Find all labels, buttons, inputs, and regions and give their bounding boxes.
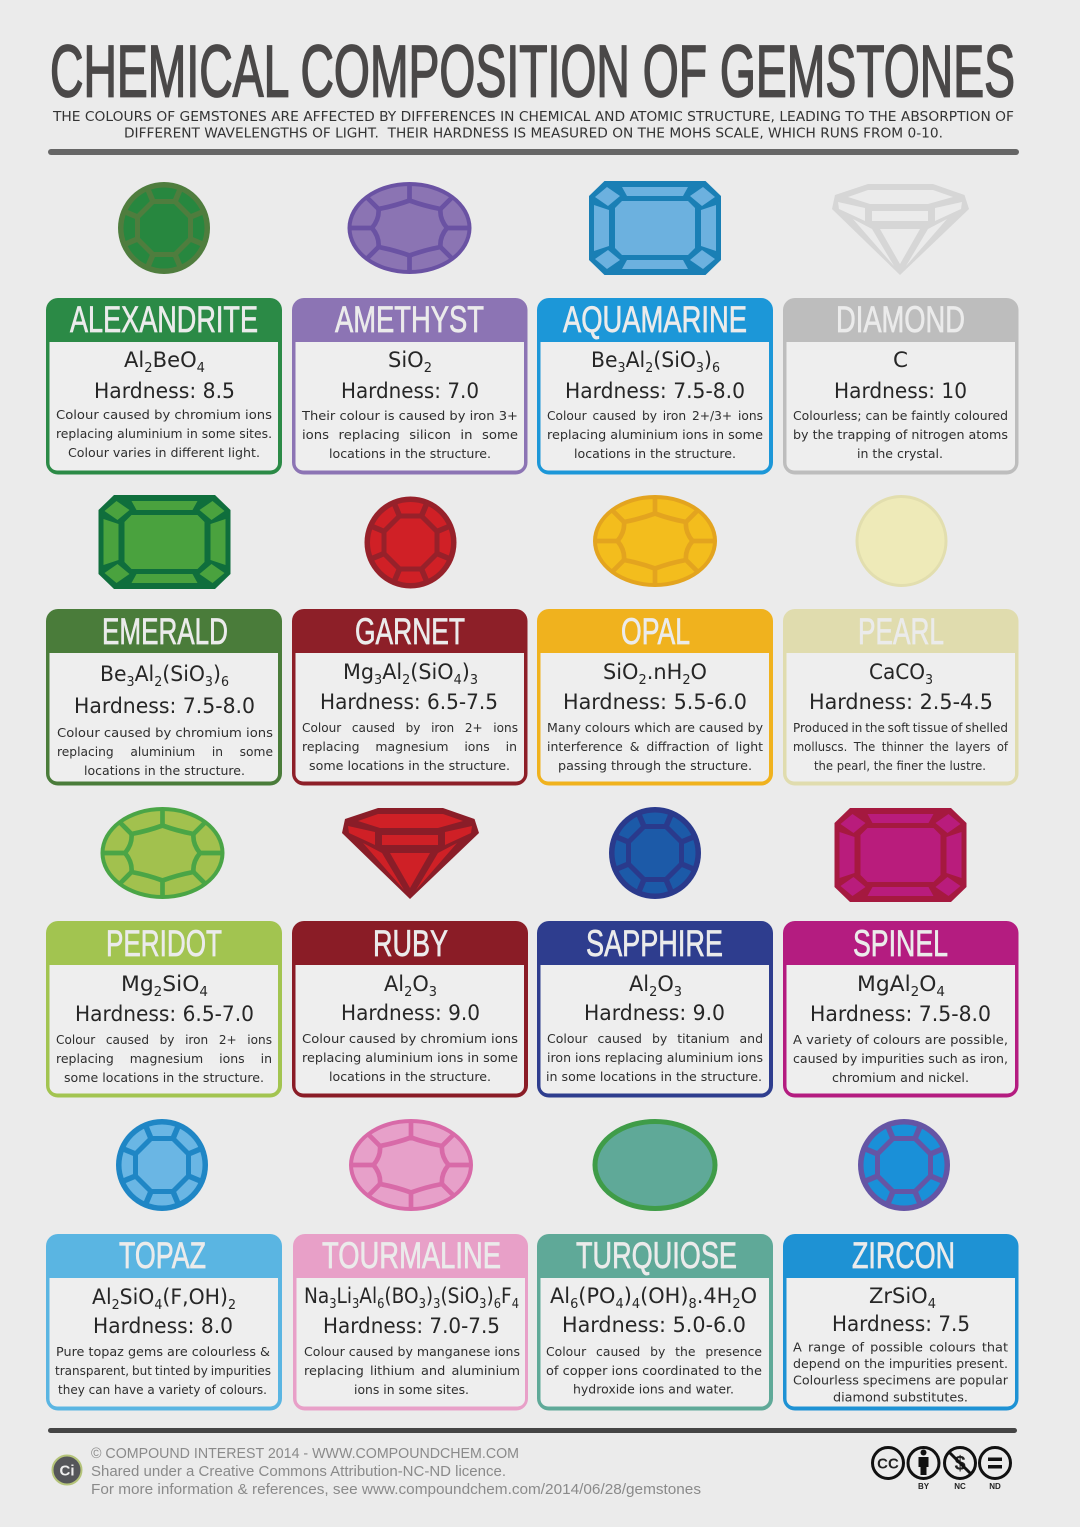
name: PERIDOT — [106, 923, 222, 964]
name: PEARL — [858, 611, 944, 652]
formula: O — [919, 972, 936, 996]
formula: O — [691, 660, 707, 684]
formula: 3 — [352, 1297, 359, 1312]
formula: 4 — [199, 985, 208, 1000]
card frame — [783, 609, 1018, 786]
icon: turquoise gem — [595, 1122, 715, 1208]
description — [793, 1340, 1009, 1404]
description: of copper ions coordinated to the — [546, 1363, 762, 1378]
description: Their colour is caused by iron 3+ — [301, 408, 518, 423]
formula: SiO — [120, 1285, 154, 1309]
name: EMERALD — [102, 611, 228, 652]
formula: Al — [135, 662, 154, 686]
formula: Al — [124, 348, 144, 372]
formula: 3 — [419, 1297, 426, 1312]
icon: opal gem — [593, 495, 717, 587]
subtitle text — [52, 110, 1014, 142]
icon: zircon gem — [858, 1119, 950, 1211]
description: ions replacing silicon in some — [302, 427, 518, 442]
card: Peridot — [46, 921, 282, 1098]
formula: Al — [92, 1285, 112, 1309]
description: by the trapping of nitrogen atoms — [793, 427, 1008, 442]
formula: SiO — [162, 972, 199, 996]
card: Ruby — [292, 921, 528, 1098]
formula: 3 — [433, 1297, 440, 1312]
description: iron ions replacing aluminium ions — [547, 1050, 763, 1065]
formula: 4 — [615, 1297, 624, 1312]
formula: 2 — [154, 675, 162, 690]
hardness: Hardness: 7.5-8.0 — [810, 1002, 991, 1026]
formula: Mg — [121, 972, 152, 996]
card: Pearl — [783, 609, 1018, 786]
description: replacing aluminium in some sites. — [56, 426, 272, 441]
formula: ) — [426, 1284, 433, 1308]
formula: ZrSiO — [869, 1284, 928, 1308]
footer credits — [91, 1445, 701, 1498]
formula: (SiO — [162, 662, 205, 686]
formula: O — [657, 972, 674, 996]
description — [301, 408, 518, 461]
formula: (SiO — [653, 348, 696, 372]
formula: Li — [337, 1284, 352, 1308]
formula: SiO — [388, 348, 424, 372]
formula: 2 — [144, 361, 153, 376]
description: Colour caused by chromium ions — [302, 1031, 518, 1046]
description: replacing aluminium ions in some — [302, 1050, 518, 1065]
card: Topaz — [46, 1234, 282, 1410]
description: locations in the structure. — [574, 446, 736, 461]
formula: 8 — [689, 1297, 697, 1312]
icon: peridot gem — [100, 807, 224, 899]
name: RUBY — [373, 923, 448, 964]
formula: ) — [624, 1284, 632, 1308]
icon: Creative Commons licence badges: CC — [877, 1456, 899, 1472]
description — [304, 1344, 520, 1397]
icon: Creative Commons licence badges — [872, 1448, 1010, 1491]
formula: Al — [629, 972, 649, 996]
formula: Al — [359, 1284, 377, 1308]
description: transparent, but tinted by impurities — [55, 1363, 271, 1378]
footer credits: Shared under a Creative Commons Attribution-NC-ND licence. — [91, 1463, 506, 1480]
icon: ruby gem — [342, 808, 479, 899]
hardness: Hardness: 9.0 — [584, 1001, 725, 1025]
formula: 3 — [470, 673, 478, 688]
formula: Al — [626, 348, 645, 372]
card: Sapphire — [537, 921, 773, 1098]
formula: 4 — [454, 673, 462, 688]
hardness: Hardness: 7.5-8.0 — [74, 694, 255, 718]
name: OPAL — [621, 611, 690, 652]
description: Colourless specimens are popular — [793, 1372, 1009, 1388]
card frame — [292, 298, 528, 474]
formula: CaCO — [869, 660, 928, 684]
card frame — [46, 921, 282, 1098]
formula: 3 — [674, 985, 682, 1000]
description: in the crystal. — [857, 446, 943, 461]
formula: ) — [462, 660, 470, 684]
subtitle text: DIFFERENT WAVELENGTHS OF LIGHT. THEIR HARDNESS IS MEASURED ON THE MOHS SCALE, WHICH RUNS FROM 0-10. — [124, 126, 943, 142]
icon: Creative Commons licence badges: ND — [989, 1482, 1001, 1491]
description: Colour varies in different light. — [68, 445, 260, 460]
card frame — [46, 609, 282, 786]
card: Tourmaline — [293, 1234, 528, 1410]
formula: 2 — [112, 1298, 120, 1313]
card: Spinel — [783, 921, 1018, 1098]
icon: garnet gem — [364, 496, 456, 588]
formula: 4 — [154, 1298, 162, 1313]
description: Colour caused by manganese ions — [304, 1344, 520, 1359]
name: DIAMOND — [836, 299, 965, 340]
description: ions in some sites. — [354, 1382, 469, 1397]
formula: 3 — [696, 361, 704, 376]
card: Opal — [537, 609, 773, 786]
card frame — [292, 609, 528, 786]
description: Colour caused by iron 2+/3+ ions — [547, 408, 763, 423]
formula: (OH) — [640, 1284, 689, 1308]
formula: ) — [704, 348, 712, 372]
description: some locations in the structure. — [64, 1070, 264, 1085]
card: Aquamarine — [537, 298, 773, 474]
hardness: Hardness: 2.5-4.5 — [809, 690, 993, 714]
formula: 2 — [404, 985, 412, 1000]
description: molluscs. The thinner the layers of — [793, 739, 1009, 754]
formula: 3 — [374, 673, 382, 688]
description: Many colours which are caused by — [547, 720, 764, 735]
card frame — [537, 921, 773, 1098]
icon: emerald gem — [98, 495, 230, 589]
formula: O — [412, 972, 429, 996]
formula: F — [501, 1284, 512, 1308]
hardness: Hardness: 6.5-7.5 — [320, 690, 498, 714]
formula: 6 — [570, 1297, 578, 1312]
hardness: Hardness: 7.0 — [341, 379, 479, 403]
description: caused by impurities such as iron, — [793, 1051, 1008, 1066]
formula: O — [741, 1284, 757, 1308]
formula: 6 — [712, 361, 720, 376]
description: Colour caused by chromium ions — [56, 407, 272, 422]
icon: Creative Commons licence badges: NC — [954, 1482, 966, 1491]
formula: Be — [591, 348, 618, 372]
name: ALEXANDRITE — [70, 299, 258, 340]
card: Turquoise — [537, 1234, 773, 1410]
name: GARNET — [355, 611, 465, 652]
formula: Al — [384, 972, 404, 996]
description: Colour caused by iron 2+ ions — [302, 720, 518, 735]
card frame — [46, 298, 282, 474]
card: Zircon — [783, 1234, 1018, 1410]
name: SPINEL — [853, 923, 948, 964]
formula: 2 — [682, 673, 691, 688]
formula: 4 — [936, 985, 945, 1000]
card frame — [783, 921, 1018, 1098]
name: ZIRCON — [852, 1235, 955, 1276]
icon: amethyst gem — [348, 182, 472, 274]
description: locations in the structure. — [329, 446, 491, 461]
description: A range of possible colours that — [793, 1340, 1008, 1354]
formula: 3 — [925, 673, 933, 688]
description: replacing magnesium ions in — [302, 739, 517, 754]
name: TOPAZ — [119, 1235, 206, 1276]
name: SAPPHIRE — [586, 923, 723, 964]
icon: topaz gem — [116, 1119, 208, 1211]
description — [547, 720, 764, 773]
card frame — [537, 609, 773, 786]
formula: Al — [382, 660, 402, 684]
footer credits: For more information & references, see www.compoundchem.com/2014/06/28/gemstones — [91, 1481, 701, 1498]
description: replacing lithium and aluminium — [304, 1363, 520, 1378]
description — [56, 407, 272, 460]
formula: 6 — [221, 675, 229, 690]
card: Emerald — [46, 609, 282, 786]
hardness: Hardness: 7.5 — [832, 1312, 970, 1336]
description: replacing aluminium ions in some — [547, 427, 763, 442]
icon: sapphire gem — [609, 807, 701, 899]
formula: 3 — [329, 1297, 337, 1312]
hardness: Hardness: 9.0 — [341, 1001, 480, 1025]
formula: (SiO — [410, 660, 454, 684]
formula: BeO — [153, 348, 197, 372]
description: A variety of colours are possible, — [793, 1032, 1008, 1047]
hardness: Hardness: 5.5-6.0 — [563, 690, 747, 714]
formula: (PO — [578, 1284, 615, 1308]
description: in some locations in the structure. — [546, 1069, 762, 1084]
formula: 2 — [649, 985, 657, 1000]
formula: 4 — [632, 1297, 640, 1312]
icon: spinel gem — [834, 808, 966, 902]
formula: (SiO — [440, 1284, 479, 1308]
description: replacing magnesium ions in — [56, 1051, 272, 1066]
icon: Creative Commons licence badges: $ — [954, 1453, 966, 1475]
formula: 2 — [645, 361, 653, 376]
icon: Compound Interest logo: Ci — [60, 1462, 74, 1480]
description: locations in the structure. — [84, 763, 245, 778]
description — [793, 1032, 1008, 1085]
description — [793, 408, 1008, 461]
description: Colourless; can be faintly coloured — [793, 408, 1008, 423]
description — [302, 1031, 518, 1084]
formula: 2 — [228, 1298, 236, 1313]
formula: 3 — [127, 675, 135, 690]
hardness: Hardness: 8.0 — [93, 1314, 233, 1338]
formula: Al — [550, 1284, 570, 1308]
card: Diamond — [783, 298, 1018, 474]
formula: ) — [486, 1284, 494, 1308]
description: Produced in the soft tissue of shelled — [793, 720, 1008, 735]
formula: ) — [213, 662, 221, 686]
description: chromium and nickel. — [832, 1070, 969, 1085]
description: some locations in the structure. — [309, 758, 510, 773]
formula: 6 — [494, 1297, 501, 1312]
formula: 2 — [911, 985, 919, 1000]
description — [547, 408, 763, 461]
description — [56, 1032, 272, 1085]
icon: aquamarine gem — [589, 181, 721, 275]
card: Amethyst — [292, 298, 528, 474]
formula: 3 — [429, 985, 437, 1000]
formula: 2 — [639, 673, 647, 688]
description: hydroxide ions and water. — [573, 1382, 734, 1396]
formula: .nH — [647, 660, 682, 684]
formula: Be — [100, 662, 127, 686]
formula: .4H — [697, 1284, 732, 1308]
description: the pearl, the finer the lustre. — [814, 758, 986, 773]
card frame — [293, 1234, 528, 1410]
formula: 4 — [928, 1297, 936, 1312]
card frame — [292, 921, 528, 1098]
description: diamond substitutes. — [833, 1390, 968, 1404]
hardness: Hardness: 7.5-8.0 — [565, 379, 745, 403]
formula: 2 — [424, 361, 432, 376]
card frame — [783, 1234, 1018, 1410]
formula: (F,OH) — [162, 1285, 228, 1309]
hardness: Hardness: 7.0-7.5 — [323, 1314, 500, 1338]
name: TURQUIOSE — [576, 1235, 737, 1276]
card frame — [537, 1234, 773, 1410]
icon: tourmaline gem — [349, 1119, 473, 1211]
description: they can have a variety of colours. — [58, 1382, 267, 1397]
name: AQUAMARINE — [563, 299, 747, 340]
card frame — [783, 298, 1018, 474]
icon: Compound Interest logo — [52, 1456, 82, 1484]
formula: (BO — [384, 1284, 419, 1308]
description — [57, 725, 273, 778]
footer credits: © COMPOUND INTEREST 2014 - WWW.COMPOUNDCHEM.COM — [91, 1445, 519, 1462]
formula: 6 — [377, 1297, 384, 1312]
formula: Na — [304, 1284, 333, 1308]
card frame — [537, 298, 773, 474]
description — [546, 1344, 762, 1396]
description: replacing aluminium in some — [57, 744, 273, 759]
formula: SiO — [603, 660, 639, 684]
description: Colour caused by iron 2+ ions — [56, 1032, 272, 1047]
formula: MgAl — [857, 972, 909, 996]
card: Garnet — [292, 609, 528, 786]
formula: 4 — [197, 361, 205, 376]
formula: Mg — [343, 660, 374, 684]
icon: pearl gem — [857, 496, 946, 586]
hardness: Hardness: 10 — [834, 379, 967, 403]
description: passing through the structure. — [558, 758, 752, 773]
hardness: Hardness: 8.5 — [94, 379, 235, 403]
description — [546, 1031, 763, 1084]
description: depend on the impurities present. — [793, 1356, 1008, 1371]
description: Colour caused by chromium ions — [57, 725, 273, 740]
description — [302, 720, 518, 773]
icon: alexandrite gem — [118, 182, 210, 274]
description — [55, 1344, 271, 1397]
formula: 3 — [479, 1297, 486, 1312]
name: AMETHYST — [335, 299, 484, 340]
description: locations in the structure. — [329, 1069, 491, 1084]
name: TOURMALINE — [322, 1235, 501, 1276]
hardness: Hardness: 5.0-6.0 — [562, 1313, 746, 1337]
card: Alexandrite — [46, 298, 282, 474]
description: interference & diffraction of light — [547, 739, 763, 754]
formula: C — [893, 348, 908, 372]
description — [793, 720, 1009, 773]
icon: Creative Commons licence badges: BY — [918, 1482, 930, 1491]
subtitle text: THE COLOURS OF GEMSTONES ARE AFFECTED BY DIFFERENCES IN CHEMICAL AND ATOMIC STRUCTURE, LEADING TO THE ABSORPTION OF — [52, 110, 1014, 125]
description: Pure topaz gems are colourless & — [56, 1344, 270, 1359]
formula: 2 — [402, 673, 410, 688]
formula: 3 — [205, 675, 213, 690]
icon: diamond gem — [832, 184, 969, 275]
formula: 4 — [512, 1297, 519, 1312]
formula: 3 — [618, 361, 626, 376]
description: Colour caused by the presence — [546, 1344, 762, 1359]
formula: 2 — [154, 985, 162, 1000]
formula: 2 — [732, 1297, 741, 1312]
card frame — [46, 1234, 282, 1410]
hardness: Hardness: 6.5-7.0 — [75, 1002, 254, 1026]
description: Colour caused by titanium and — [547, 1031, 763, 1046]
